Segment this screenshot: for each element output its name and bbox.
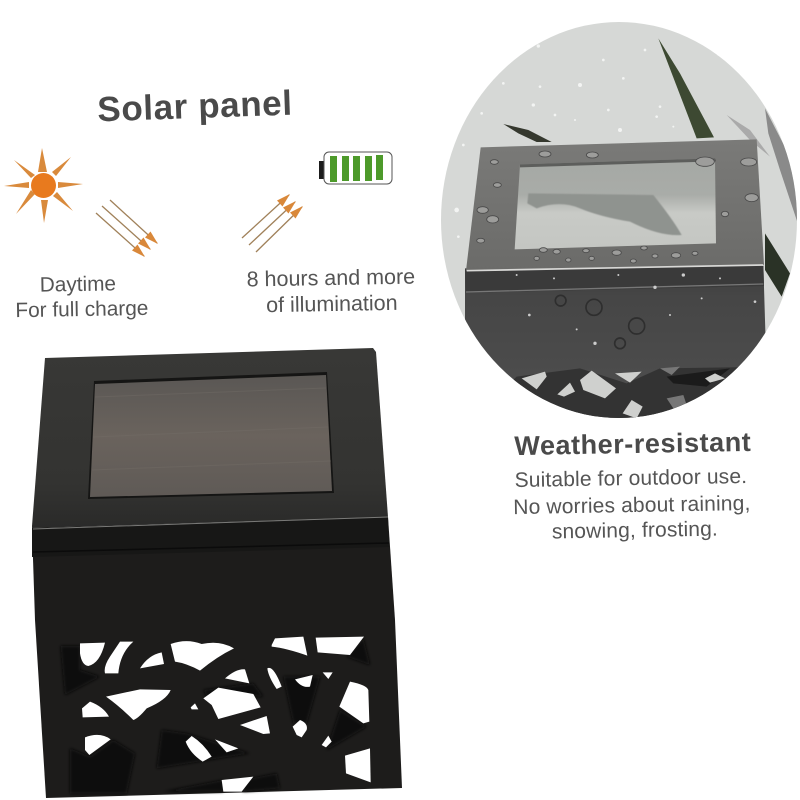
heading: Weather-resistant: Weather-resistant bbox=[514, 427, 752, 461]
lid in photo bbox=[466, 139, 764, 271]
photo background bbox=[441, 22, 797, 380]
arrows: energy going up to the battery bbox=[242, 194, 303, 252]
cut-out pattern bbox=[61, 637, 371, 793]
photo: waterproof closeup in oval bbox=[440, 20, 800, 430]
lamp body in photo bbox=[465, 265, 768, 430]
heading: Solar panel: Solar panel bbox=[97, 84, 293, 129]
solar cell bbox=[88, 372, 334, 499]
text: weather description bbox=[513, 465, 751, 543]
text: illumination bbox=[246, 265, 415, 317]
text: weather description: snowing, frosting. bbox=[552, 518, 718, 543]
icon: sun bbox=[4, 148, 83, 223]
text: daytime for full charge: Daytime bbox=[40, 272, 116, 297]
lamp front body bbox=[32, 517, 402, 798]
text: weather description: No worries about raining, bbox=[513, 492, 751, 519]
lid front seam bbox=[32, 517, 389, 557]
plant leaves bbox=[503, 38, 800, 297]
text: daytime for full charge bbox=[15, 272, 149, 322]
photo cut-outs bbox=[514, 366, 738, 418]
text: illumination: of illumination bbox=[266, 291, 398, 317]
lamp lid bbox=[32, 348, 388, 528]
droplets on front bbox=[555, 295, 645, 349]
glass panel in photo bbox=[515, 158, 716, 249]
rain specks on wall bbox=[454, 44, 719, 238]
arrows: sunlight going down to the panel bbox=[96, 200, 158, 257]
text: weather description: Suitable for outdoor use. bbox=[514, 465, 747, 492]
text: illumination: 8 hours and more bbox=[246, 265, 415, 291]
text: daytime for full charge: For full charge bbox=[15, 297, 149, 322]
product: solar light closeup bbox=[32, 348, 402, 798]
water droplets bbox=[477, 151, 758, 263]
icon: battery bbox=[319, 152, 392, 184]
